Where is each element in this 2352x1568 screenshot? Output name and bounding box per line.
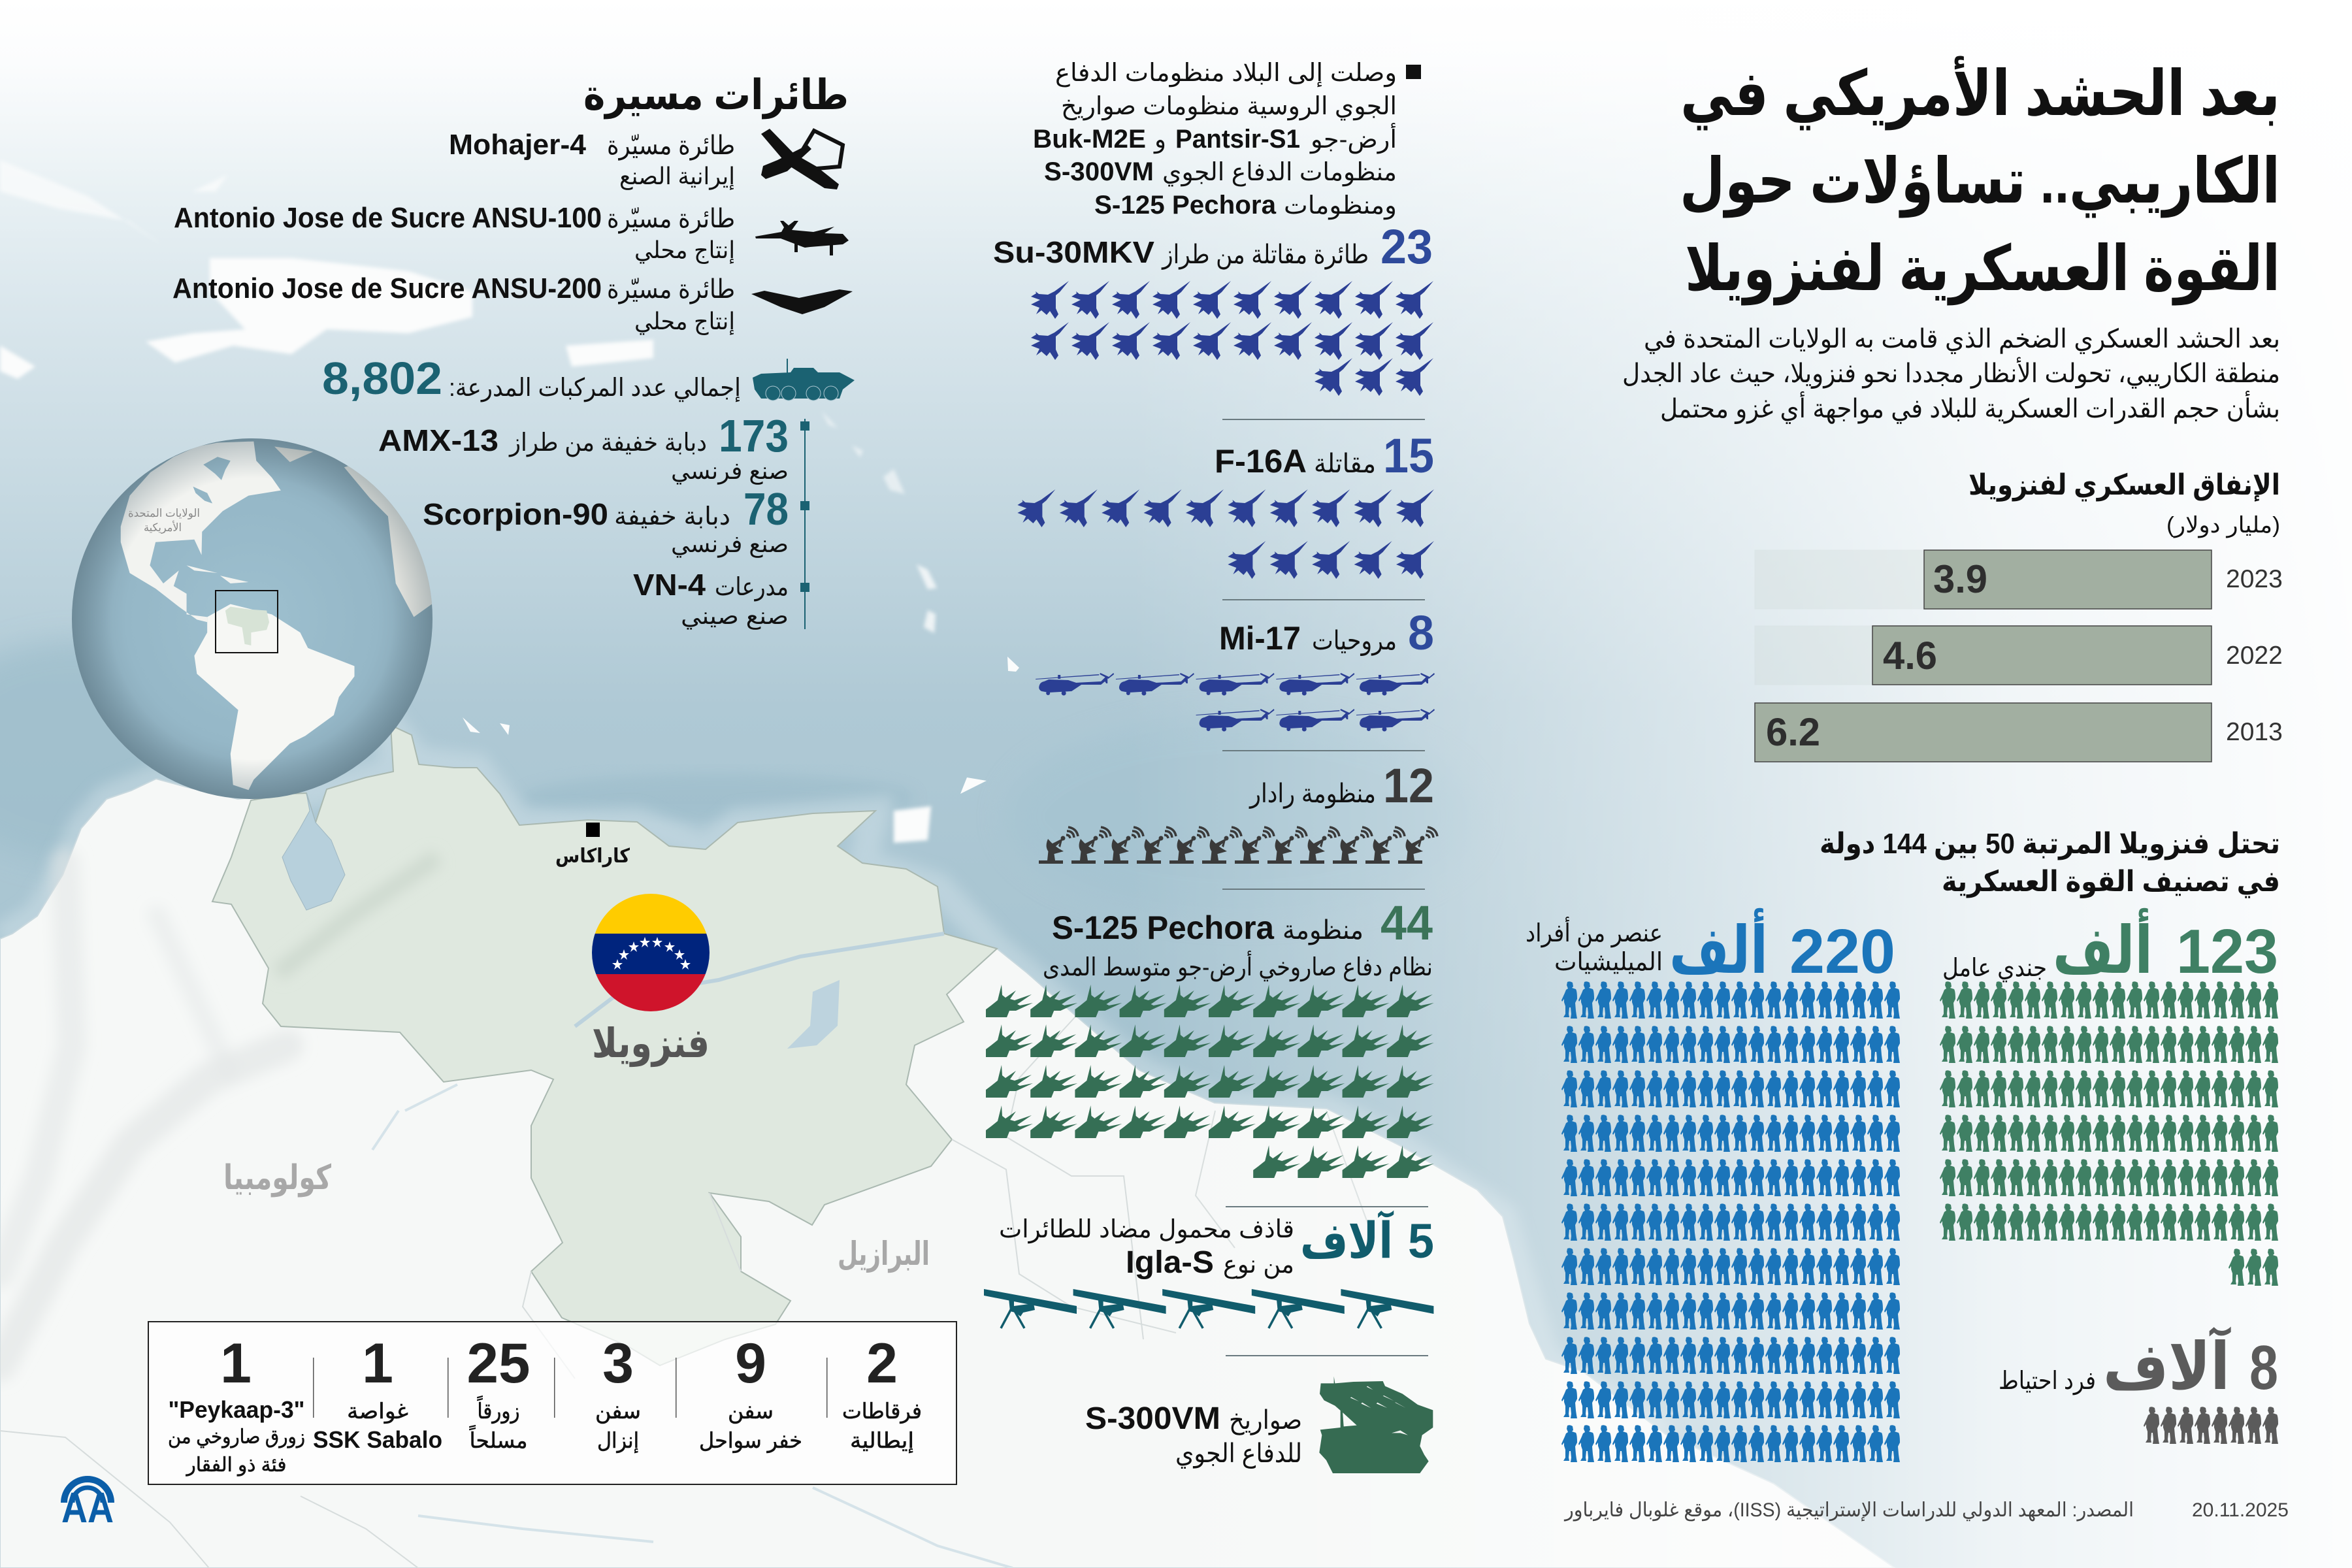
label: Brazil: البرازيل — [838, 1235, 930, 1273]
panel: Mi-17 — [1036, 606, 1435, 732]
Scorpion-90: دبابة خفيفة — [614, 503, 730, 531]
icon: ANSU-200 drone — [751, 289, 853, 314]
heading: نظام دفاع صاروخي أرض-جو متوسط المدى — [1043, 951, 1433, 982]
stat: 8 thousand: فرد احتياط — [1999, 1367, 2096, 1396]
stat: 220 thousand: ألف — [1669, 907, 1768, 987]
heading: Igla-S — [1126, 1245, 1214, 1280]
label: Venezuela: فنزويلا — [592, 1021, 710, 1067]
icon: S-300 launcher — [1319, 1377, 1433, 1473]
stat: landing ships: إنزال — [597, 1428, 639, 1454]
stat: coast guard: 9 — [735, 1332, 766, 1395]
AMX-13: صنع فرنسي — [671, 457, 789, 485]
drone: Mohajer-4: إيرانية الصنع — [619, 163, 735, 190]
chart heading: (مليار دولار) — [2166, 513, 2280, 538]
panel: F-16A — [1017, 429, 1434, 579]
heading: مروحيات — [1312, 627, 1397, 656]
heading: 23 — [1380, 220, 1433, 274]
AMX-13: 173 — [719, 410, 789, 461]
heading: 5 — [1408, 1214, 1434, 1268]
Scorpion-90: صنع فرنسي — [671, 531, 789, 558]
bar 2013 — [1755, 703, 2283, 762]
total armored vehicles: 8,802 — [322, 353, 442, 404]
heading: 8 — [1408, 606, 1434, 660]
bar 2022 — [1755, 626, 2283, 685]
bar 2013: 2013 — [2226, 718, 2283, 746]
intro paragraph: بعد الحشد العسكري الضخم الذي قامت به الولايات المتحدة في — [1644, 325, 2280, 354]
stat: missile boat: زورق صاروخي من — [168, 1426, 305, 1448]
globe label: USA: الولايات المتحدة — [128, 507, 200, 519]
stat: armed boats: زورقاً — [477, 1396, 520, 1424]
bar 2023: 3.9 — [1933, 557, 1987, 601]
stat: 123 thousand: جندي عامل — [1942, 955, 2047, 982]
stat: frigates: إيطالية — [850, 1428, 914, 1454]
heading: منظومة رادار — [1249, 779, 1376, 809]
heading: قاذف محمول مضاد للطائرات — [999, 1216, 1294, 1244]
helicopter pictogram — [1036, 673, 1435, 732]
intro paragraph — [1622, 325, 2280, 424]
stat: submarine — [313, 1332, 442, 1453]
panel: S-300VM: صواريخ — [1229, 1406, 1302, 1435]
heading: S-125 Pechora — [1052, 909, 1275, 946]
VN-4 — [633, 568, 789, 630]
heading: 44 — [1380, 896, 1433, 950]
heading — [1215, 429, 1434, 483]
islands — [0, 160, 1019, 843]
heading — [999, 1210, 1434, 1280]
bar 2013: 6.2 — [1766, 710, 1820, 754]
stat: 123 thousand: 123 — [2176, 917, 2278, 987]
stat: landing ships: 3 — [602, 1332, 634, 1395]
bullet — [1406, 65, 1421, 79]
VN-4: مدرعات — [715, 574, 789, 601]
stat: missile boat: فئة ذو الفقار — [186, 1454, 286, 1477]
air defence note: Buk-M2E — [1033, 125, 1146, 154]
heading: من نوع — [1223, 1251, 1294, 1279]
soldier pictogram — [1940, 981, 2278, 1286]
icon: Venezuela flag — [588, 892, 712, 1013]
stat: submarine: SSK Sabalo — [313, 1426, 442, 1453]
bar 2023: 2023 — [2226, 565, 2283, 593]
icon: ANSU-100 drone — [755, 221, 849, 255]
source note: المصدر: المعهد الدولي للدراسات الإستراتيجية (IISS)، موقع غلوبال فايرباور — [1563, 1499, 2134, 1522]
heading: آلاف — [1300, 1210, 1394, 1269]
panel: S-125 Pechora — [986, 896, 1434, 1178]
stat: landing ships — [595, 1332, 641, 1454]
drone: ANSU-200: طائرة مسيّرة — [607, 275, 735, 304]
panel: reserves — [1999, 1326, 2278, 1444]
logo: Anadolu Agency: AA — [61, 1483, 114, 1531]
drone: Mohajer-4: طائرة مسيّرة — [607, 131, 735, 161]
stat: coast guard: خفر سواحل — [699, 1428, 802, 1453]
drone: Mohajer-4 — [449, 129, 843, 190]
total armored vehicles: إجمالي عدد المركبات المدرعة: — [449, 374, 741, 402]
panel: S-300VM: للدفاع الجوي — [1175, 1439, 1302, 1469]
stat: 220 thousand — [1526, 907, 1895, 987]
label: Colombia: كولومبيا — [223, 1159, 332, 1198]
jet pictogram — [1017, 489, 1434, 579]
AMX-13: دبابة خفيفة من طراز — [508, 429, 707, 457]
Scorpion-90 — [423, 483, 789, 558]
stat: 220 thousand: عنصر من أفراد — [1526, 917, 1663, 948]
stat: coast guard — [699, 1332, 802, 1453]
lake maracaibo — [282, 793, 345, 910]
radar pictogram — [1039, 827, 1437, 864]
ranking heading: في تصنيف القوة العسكرية — [1942, 866, 2280, 898]
total armored vehicles — [322, 353, 855, 404]
air defence note: أرض-جو — [1309, 123, 1397, 154]
heading: منظومة — [1282, 916, 1364, 945]
globe label: USA: الأمريكية — [144, 521, 182, 534]
air defence note: ومنظومات — [1284, 192, 1397, 220]
stat: missile boat: 1 — [220, 1332, 252, 1395]
VN-4: VN-4 — [633, 568, 706, 602]
panel: radar — [1039, 759, 1437, 864]
stat: 220 thousand: الميليشيات — [1554, 949, 1663, 976]
air defence note: Pantsir-S1 — [1175, 125, 1300, 154]
air defence note: وصلت إلى البلاد منظومات الدفاع — [1055, 59, 1397, 88]
locator box — [216, 591, 278, 653]
bar 2023 — [1755, 550, 2283, 609]
stat: 8 thousand: 8 — [2249, 1333, 2278, 1403]
stat: 8 thousand: آلاف — [2103, 1326, 2231, 1403]
air defence note: و — [1153, 126, 1166, 154]
stat: frigates: فرقاطات — [842, 1399, 922, 1424]
panel: active soldiers — [1940, 907, 2278, 1286]
heading — [1043, 896, 1433, 982]
stat: 220 thousand: 220 — [1789, 917, 1895, 987]
drone: ANSU-100 — [174, 202, 849, 264]
launcher pictogram — [984, 1289, 1433, 1328]
drone: ANSU-200 — [172, 272, 853, 335]
stat: armed boats: 25 — [466, 1332, 531, 1395]
air defence note: الجوي الروسية منظومات صواريخ — [1061, 93, 1397, 121]
globe locator map — [72, 438, 434, 799]
Venezuela — [212, 725, 997, 1365]
heading: F-16A — [1215, 443, 1307, 480]
bar 2022: 2022 — [2226, 642, 2283, 670]
panel: militia — [1526, 907, 1900, 1462]
label: Caracas — [555, 823, 630, 867]
date: 20.11.2025 — [2192, 1499, 2289, 1521]
jet pictogram — [1031, 281, 1433, 396]
drone: ANSU-100: إنتاج محلي — [634, 237, 735, 264]
drone: ANSU-200: Antonio Jose de Sucre ANSU-200 — [172, 272, 602, 304]
stat: 123 thousand — [1942, 907, 2278, 987]
bar 2022: 4.6 — [1883, 634, 1937, 678]
stat: 123 thousand: ألف — [2053, 907, 2153, 987]
heading: طائرة مقاتلة من طراز — [1161, 240, 1369, 270]
stat: missile boat: "Peykaap-3" — [169, 1396, 304, 1423]
missile pictogram — [986, 985, 1434, 1178]
globe label: USA — [128, 507, 200, 534]
stat: frigates: 2 — [866, 1332, 898, 1395]
heading: Su-30MKV — [993, 235, 1154, 269]
heading — [1249, 759, 1434, 813]
intro paragraph: منطقة الكاريبي، تحولت الأنظار مجددا نحو فنزويلا، حيث عاد الجدل — [1622, 357, 2280, 389]
militia pictogram — [1561, 981, 1900, 1462]
stat: 8 thousand — [1999, 1326, 2278, 1403]
stat: submarine: 1 — [362, 1332, 393, 1395]
icon: Mohajer-4 drone — [761, 129, 843, 189]
panel: Igla-S — [984, 1210, 1434, 1328]
heading: Mi-17 — [1219, 620, 1301, 657]
stat: missile boat — [168, 1332, 305, 1477]
panel: S-300VM — [1085, 1377, 1433, 1473]
AMX-13 — [378, 410, 789, 485]
panel: naval forces — [148, 1322, 956, 1484]
air defence note — [1033, 59, 1421, 220]
stat: frigates — [842, 1332, 922, 1454]
heading: 12 — [1383, 759, 1434, 813]
drone: ANSU-100: طائرة مسيّرة — [607, 204, 735, 234]
air defence note: S-300VM — [1044, 157, 1154, 186]
intro paragraph: بشأن حجم القدرات العسكرية للبلاد في مواجهة أي غزو محتمل — [1660, 391, 2280, 424]
heading: 15 — [1383, 429, 1434, 483]
VN-4: صنع صيني — [681, 602, 789, 630]
armored vehicle timeline — [378, 410, 809, 630]
heading — [1219, 606, 1434, 660]
title — [1680, 56, 2280, 306]
chart heading: الإنفاق العسكري لفنزويلا — [1968, 469, 2280, 502]
heading: drones: طائرات مسيرة — [583, 71, 849, 120]
AMX-13: AMX-13 — [378, 423, 498, 457]
stat: armed boats — [466, 1332, 531, 1452]
panel: Su-30MKV — [993, 220, 1433, 396]
panel: S-300VM: S-300VM — [1085, 1401, 1220, 1436]
air defence note: منظومات الدفاع الجوي — [1162, 159, 1397, 187]
mountains — [0, 862, 287, 1365]
stat: coast guard: سفن — [728, 1399, 774, 1424]
stat: landing ships: سفن — [595, 1399, 641, 1424]
Scorpion-90: 78 — [743, 483, 789, 534]
Scorpion-90: Scorpion-90 — [423, 497, 608, 531]
ranking heading — [1820, 828, 2280, 898]
heading: مقاتلة — [1314, 449, 1376, 478]
land — [0, 725, 1895, 1568]
ranking heading: تحتل فنزويلا المرتبة 50 بين 144 دولة — [1820, 828, 2280, 860]
stat: armed boats: مسلحاً — [469, 1425, 528, 1452]
stat: submarine: غواصة — [347, 1399, 408, 1424]
chart heading — [1968, 469, 2280, 538]
panel: military spending chart — [1755, 469, 2283, 762]
drone: Mohajer-4: Mohajer-4 — [449, 129, 587, 161]
heading — [993, 220, 1433, 274]
drone: ANSU-200: إنتاج محلي — [634, 308, 735, 335]
reserve pictogram — [2144, 1407, 2278, 1444]
icon: armored vehicle — [753, 359, 855, 400]
air defence note: S-125 Pechora — [1094, 191, 1277, 220]
drone: ANSU-100: Antonio Jose de Sucre ANSU-100 — [174, 202, 602, 234]
label: Caracas: كاراكاس — [555, 845, 630, 867]
